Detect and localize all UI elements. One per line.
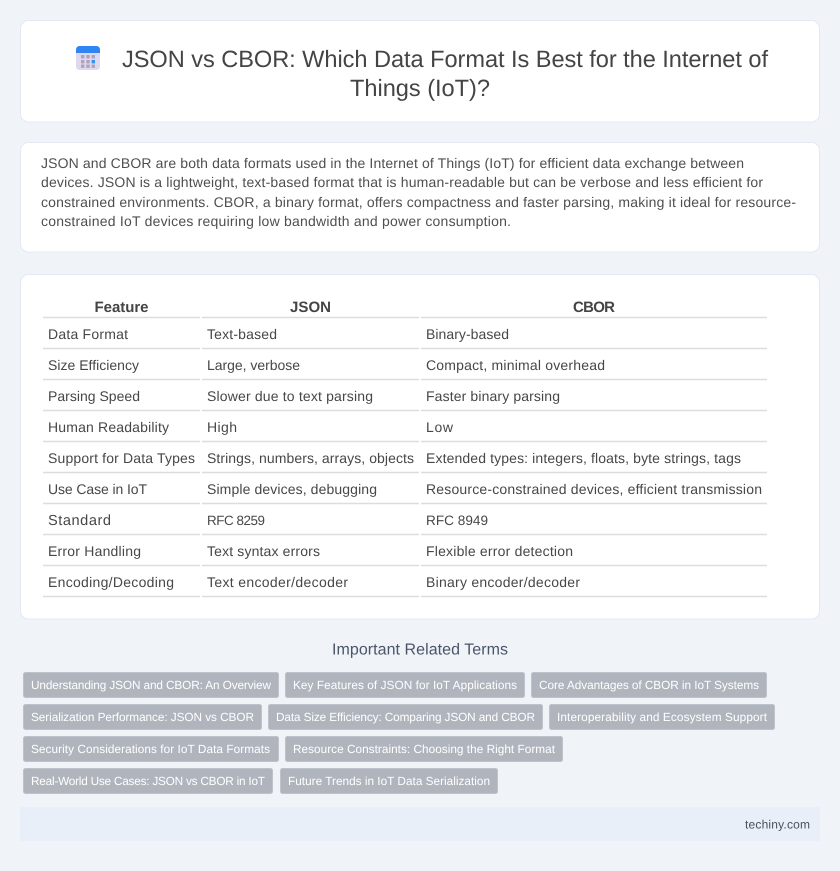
title: JSON vs CBOR: Which Data Format Is Best for the Internet of — [122, 47, 768, 73]
tag — [268, 704, 542, 730]
title panel — [20, 20, 820, 122]
tag: Future Trends in IoT Data Serialization — [288, 774, 490, 788]
row: size efficiency — [48, 357, 605, 373]
footer — [20, 807, 820, 841]
intro paragraph — [41, 155, 796, 229]
tag — [532, 672, 766, 698]
related terms tags — [24, 672, 774, 794]
intro paragraph: devices. JSON is a lightweight, text-based format that is human-readable but can be verbose and less efficient for — [41, 174, 763, 190]
row: size efficiency: Size Efficiency — [48, 357, 139, 373]
row: encoding: Encoding/Decoding — [48, 574, 174, 590]
table header: Feature — [94, 299, 148, 316]
intro paragraph: JSON and CBOR are both data formats used in the Internet of Things (IoT) for efficient data exchange between — [41, 155, 744, 171]
row: use case: Simple devices, debugging — [207, 481, 377, 497]
row: data types: Support for Data Types — [48, 450, 195, 466]
row: standard: Standard — [48, 513, 111, 529]
tag: Key Features of JSON for IoT Applications — [293, 678, 517, 692]
row: use case: Use Case in IoT — [48, 481, 147, 497]
row: parsing speed: Faster binary parsing — [426, 388, 560, 404]
row: use case — [48, 481, 762, 497]
tag — [550, 704, 774, 730]
tag — [286, 736, 562, 762]
row: error handling: Text syntax errors — [207, 543, 320, 559]
row: standard: RFC 8949 — [426, 513, 488, 528]
row: standard: RFC 8259 — [207, 513, 265, 528]
row: encoding — [48, 574, 580, 590]
row: human readability — [48, 419, 454, 435]
tag: Understanding JSON and CBOR: An Overview — [31, 678, 271, 692]
row: parsing speed: Slower due to text parsing — [207, 388, 373, 404]
row: size efficiency: Large, verbose — [207, 357, 300, 373]
title: Things (IoT)? — [350, 76, 490, 102]
row: encoding: Text encoder/decoder — [207, 574, 348, 590]
intro paragraph: constrained environments. CBOR, a binary format, offers compactness and faster parsing, making it ideal for resource- — [41, 194, 796, 210]
row: parsing speed — [48, 388, 560, 404]
row: data format: Binary-based — [426, 326, 509, 342]
row: error handling: Flexible error detection — [426, 543, 573, 559]
row: use case: Resource-constrained devices, efficient transmission — [426, 481, 762, 497]
icon: calendar — [76, 46, 100, 70]
panel: comparison table — [20, 274, 820, 619]
source credit: techiny.com — [745, 818, 810, 832]
tag — [24, 768, 272, 794]
row: parsing speed: Parsing Speed — [48, 388, 140, 404]
row: data types — [48, 450, 741, 466]
tag — [286, 672, 524, 698]
table header: JSON — [290, 299, 331, 316]
tag: Data Size Efficiency: Comparing JSON and CBOR — [276, 710, 535, 724]
row: encoding: Binary encoder/decoder — [426, 574, 580, 590]
tag: Core Advantages of CBOR in IoT Systems — [539, 678, 759, 692]
related terms heading: Important Related Terms — [332, 642, 508, 658]
row: error handling: Error Handling — [48, 543, 141, 559]
tag: Serialization Performance: JSON vs CBOR — [31, 710, 254, 724]
tag: Resource Constraints: Choosing the Right Format — [293, 742, 556, 756]
row: standard — [48, 513, 488, 529]
row: human readability: Low — [426, 419, 454, 435]
table header: CBOR — [573, 299, 615, 316]
row: data format: Data Format — [48, 326, 128, 342]
tag: Real-World Use Cases: JSON vs CBOR in IoT — [31, 774, 265, 788]
row: human readability: Human Readability — [48, 419, 169, 435]
row: data format — [48, 326, 509, 342]
tag — [24, 704, 262, 730]
row: size efficiency: Compact, minimal overhead — [426, 357, 605, 373]
panel: introduction — [20, 142, 820, 252]
row: error handling — [48, 543, 573, 559]
title — [122, 47, 768, 102]
row: data types: Extended types: integers, floats, byte strings, tags — [426, 450, 741, 466]
row: data format: Text-based — [207, 326, 277, 342]
tag — [24, 672, 278, 698]
tag: Security Considerations for IoT Data Formats — [31, 742, 270, 756]
tag — [24, 736, 278, 762]
intro paragraph: constrained IoT devices requiring low bandwidth and power consumption. — [41, 213, 511, 229]
table rules — [43, 318, 767, 596]
tag: Interoperability and Ecosystem Support — [557, 710, 768, 724]
row: data types: Strings, numbers, arrays, objects — [207, 450, 414, 466]
tag — [280, 768, 498, 794]
table header — [94, 299, 615, 316]
row: human readability: High — [207, 419, 237, 435]
